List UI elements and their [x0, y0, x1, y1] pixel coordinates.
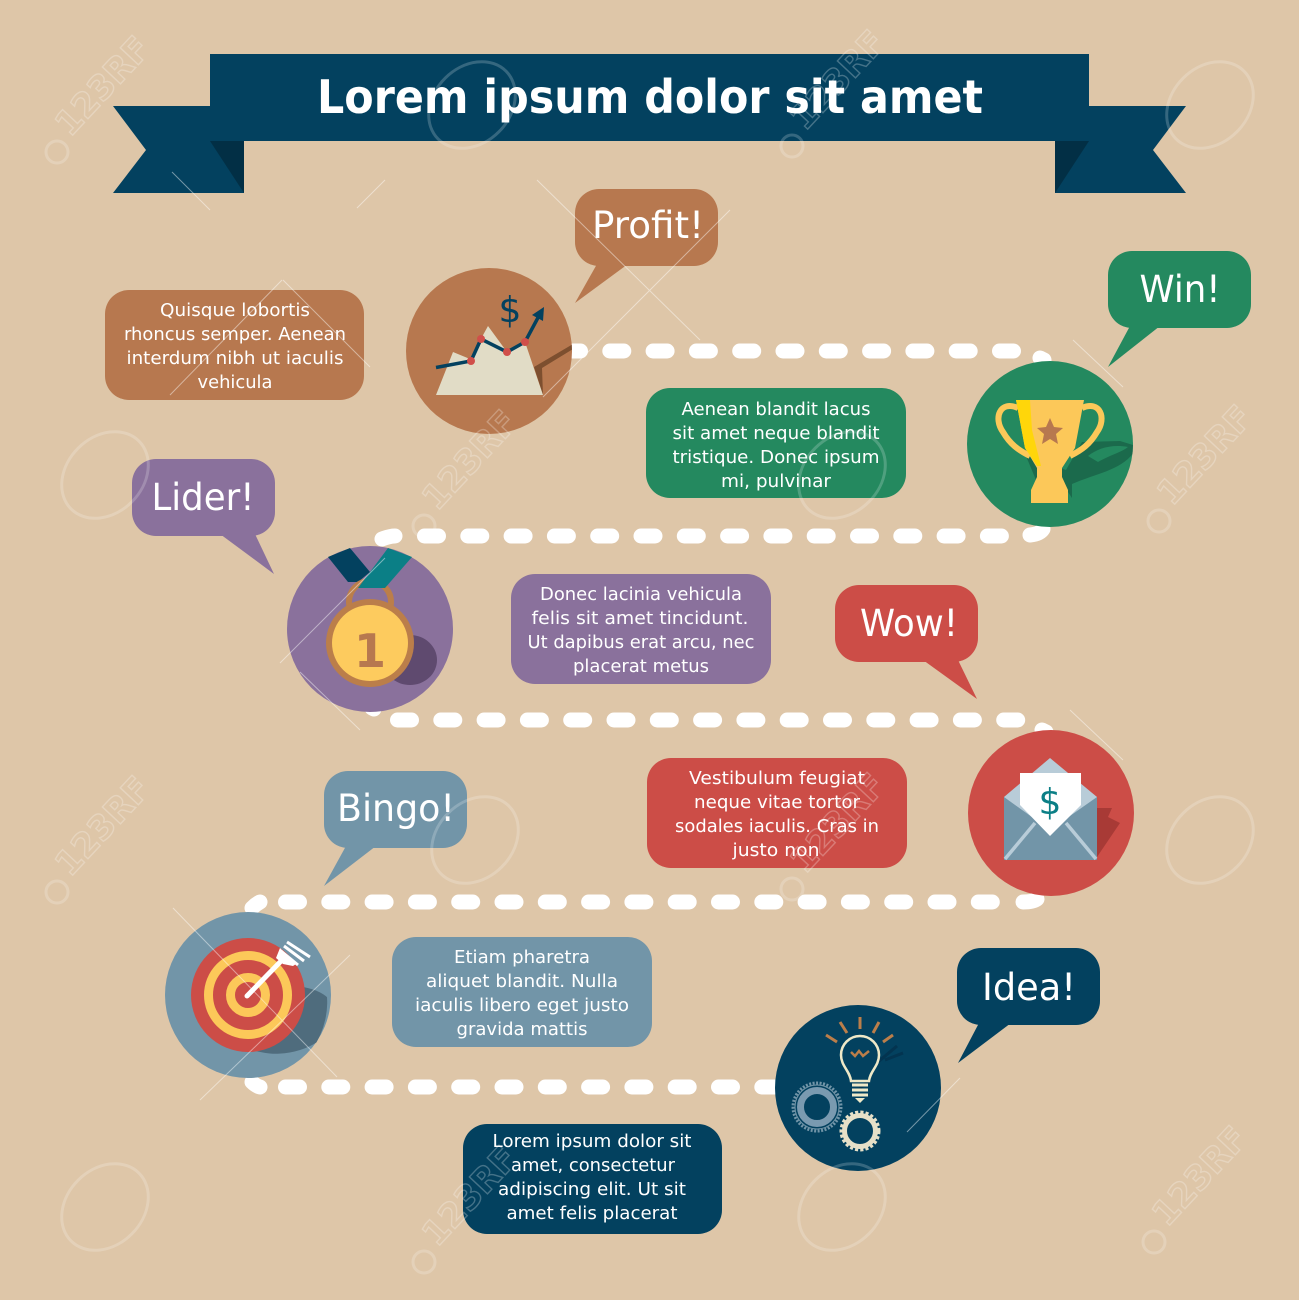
text box: Lider	[511, 574, 771, 684]
text box: Win: sit amet neque blandit	[672, 423, 880, 444]
watermark overlay: 123RF	[1144, 1119, 1256, 1234]
text box: Lider: felis sit amet tincidunt.	[532, 608, 748, 629]
icon: trophy	[967, 361, 1134, 527]
text box: Wow	[647, 758, 907, 868]
text box: Lider: Ut dapibus erat arcu, nec	[528, 632, 754, 653]
watermark overlay: 123RF	[1149, 398, 1261, 513]
text box: Win: Aenean blandit lacus	[682, 399, 870, 420]
icon: medal: 1	[354, 624, 386, 678]
text box: Wow: sodales iaculis. Cras in	[675, 816, 879, 837]
step: Wow	[647, 585, 1134, 896]
watermark overlay: 123RF	[47, 29, 159, 144]
text box: Profit: rhoncus semper. Aenean	[124, 324, 346, 345]
speech bubble: Idea: Idea!	[982, 966, 1076, 1009]
text box: Lider: Donec lacinia vehicula	[540, 584, 742, 605]
text box: Win: tristique. Donec ipsum	[672, 447, 880, 468]
speech bubble: Wow	[835, 585, 978, 699]
text box: Idea	[463, 1124, 722, 1234]
title: Lorem ipsum dolor sit amet	[317, 70, 983, 124]
text box: Bingo: iaculis libero eget justo	[415, 995, 629, 1016]
text box: Lider: placerat metus	[573, 656, 709, 677]
title ribbon	[113, 54, 1186, 193]
icon: light bulb and gears	[775, 1005, 941, 1171]
speech bubble: Profit	[575, 189, 718, 303]
text box: Win	[646, 388, 906, 498]
text box: Profit	[105, 290, 364, 400]
watermark overlay: 123RF	[47, 769, 159, 884]
text box: Win: mi, pulvinar	[721, 471, 832, 492]
watermark overlay: 123RF	[782, 23, 894, 138]
speech bubble: Wow: Wow!	[860, 602, 958, 645]
step: Idea	[463, 948, 1100, 1234]
speech bubble: Lider: Lider!	[152, 476, 254, 519]
text box: Wow: neque vitae tortor	[694, 792, 861, 813]
icon: medal	[287, 546, 453, 712]
text box: Idea: amet felis placerat	[506, 1203, 678, 1224]
text box: Wow: justo non	[731, 840, 820, 861]
watermark overlay: 123RF	[782, 766, 894, 881]
text box: Idea: Lorem ipsum dolor sit	[492, 1131, 692, 1152]
text box: Idea: adipiscing elit. Ut sit	[498, 1179, 686, 1200]
speech bubble: Bingo: Bingo!	[337, 787, 455, 830]
text box: Profit: vehicula	[198, 372, 272, 393]
text box: Profit: Quisque lobortis	[160, 300, 310, 321]
text box: Bingo: aliquet blandit. Nulla	[426, 971, 618, 992]
dashed path connecting the steps	[252, 351, 1046, 1087]
text box: Profit: interdum nibh ut iaculis	[126, 348, 344, 369]
text box: Bingo: Etiam pharetra	[454, 947, 590, 968]
text box: Wow: Vestibulum feugiat	[689, 768, 865, 789]
text box: Idea: amet, consectetur	[511, 1155, 676, 1176]
step: Lider	[132, 459, 771, 712]
icon: target with dart	[165, 912, 341, 1078]
speech bubble: Profit: Profit!	[592, 204, 704, 247]
step: Profit	[105, 189, 718, 434]
icon: mountain chart with dollar	[406, 268, 573, 434]
speech bubble: Bingo	[324, 771, 467, 886]
watermark overlay: 123RF	[414, 1139, 526, 1254]
step: Bingo	[165, 771, 652, 1078]
speech bubble: Win	[1108, 251, 1251, 367]
icon: envelope with dollar	[968, 730, 1134, 896]
speech bubble: Lider	[132, 459, 275, 574]
text box: Bingo	[392, 937, 652, 1047]
watermark overlay: 123RF	[414, 403, 526, 518]
icon: mountain chart with dollar: $	[499, 290, 521, 331]
text box: Bingo: gravida mattis	[456, 1019, 588, 1040]
icon: envelope with dollar: $	[1039, 782, 1061, 823]
step: Win	[646, 251, 1251, 527]
speech bubble: Idea	[957, 948, 1100, 1063]
speech bubble: Win: Win!	[1140, 268, 1220, 311]
